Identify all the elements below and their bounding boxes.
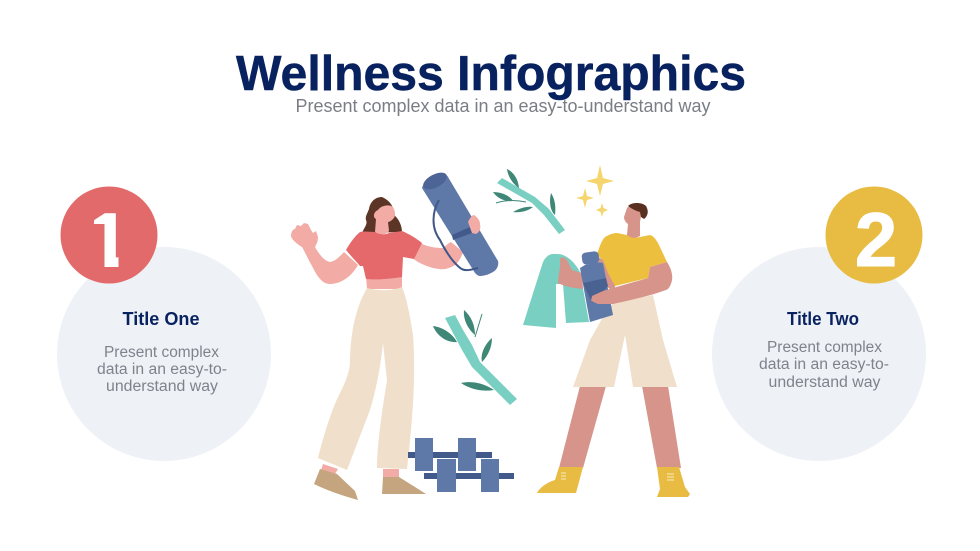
right body text: data in an easy-to- bbox=[759, 356, 889, 373]
red number badge bbox=[60, 186, 158, 284]
icon: dumbbells bbox=[408, 438, 514, 492]
left heading: Title One bbox=[122, 309, 200, 329]
woman shirt bbox=[346, 231, 422, 279]
right body text: Present complex bbox=[767, 339, 882, 356]
man right shoe bbox=[657, 467, 690, 497]
woman right shoe bbox=[382, 477, 426, 494]
woman neck and face bbox=[374, 205, 395, 234]
icon: upper bamboo bbox=[493, 169, 565, 234]
icon: lower bamboo bbox=[433, 310, 517, 405]
man left forearm bbox=[558, 258, 583, 289]
right heading: Title Two bbox=[787, 309, 859, 329]
man legs bbox=[559, 386, 606, 468]
woman right socks bbox=[383, 469, 399, 477]
woman hair bbox=[362, 197, 402, 233]
shoe laces bbox=[561, 473, 674, 480]
yoga mat bbox=[420, 169, 498, 276]
left background circle bbox=[57, 247, 271, 461]
man left shoe bbox=[537, 467, 583, 493]
man arm holding bottle bbox=[591, 262, 672, 304]
left body text bbox=[97, 344, 227, 395]
man upper arm behind bottle bbox=[598, 257, 616, 292]
water bottle bbox=[580, 251, 613, 322]
panel: right item bbox=[712, 186, 926, 461]
woman left arm bbox=[291, 223, 358, 284]
woman midriff bbox=[366, 275, 402, 289]
yellow number badge bbox=[826, 186, 922, 284]
towel bbox=[523, 254, 589, 328]
right background circle bbox=[712, 247, 926, 461]
woman left shoe bbox=[314, 469, 358, 500]
woman right arm bbox=[412, 242, 463, 269]
man hair bbox=[628, 203, 648, 219]
left body text: Present complex bbox=[104, 344, 219, 361]
title: Wellness Infographics bbox=[236, 47, 746, 101]
red number badge: 1 bbox=[87, 198, 129, 282]
illustration: man with towel and bottle bbox=[523, 203, 690, 497]
subtitle: Present complex data in an easy-to-understand way bbox=[296, 96, 710, 116]
icon: sparkles bbox=[576, 165, 614, 217]
right body text: understand way bbox=[768, 374, 881, 391]
man shorts bbox=[573, 295, 677, 387]
woman trousers bbox=[318, 287, 414, 470]
illustration: woman with yoga mat bbox=[291, 169, 498, 500]
left body text: data in an easy-to- bbox=[97, 361, 227, 378]
woman left socks bbox=[321, 464, 338, 474]
panel: left item bbox=[57, 186, 271, 461]
man neck and face bbox=[624, 206, 642, 238]
right body text bbox=[759, 339, 889, 391]
yellow number badge: 2 bbox=[855, 198, 897, 283]
man shirt bbox=[597, 233, 667, 286]
woman hand on mat bbox=[468, 215, 480, 234]
left body text: understand way bbox=[106, 378, 218, 395]
